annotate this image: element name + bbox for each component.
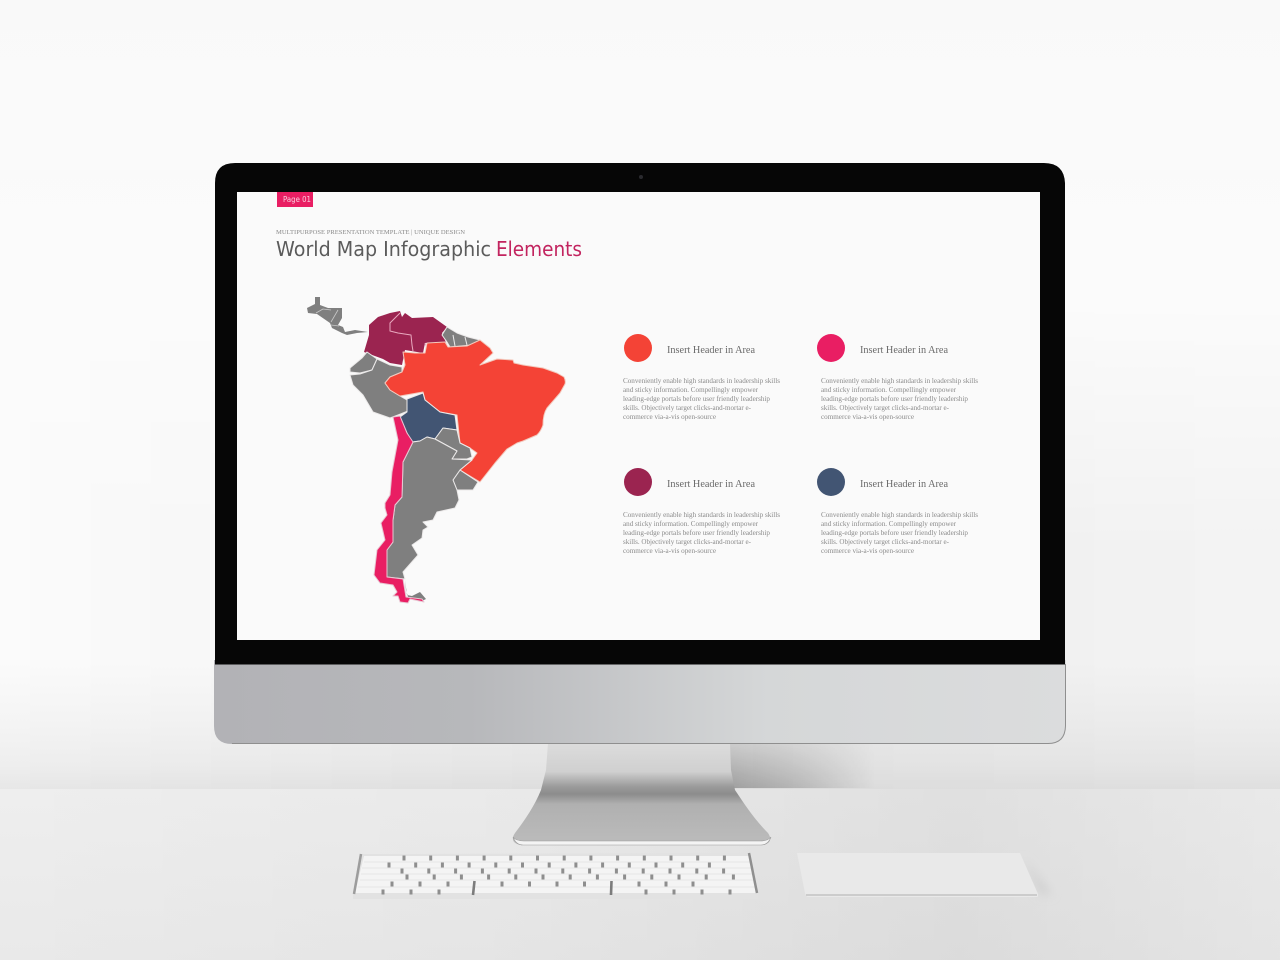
background: wall and desk — [0, 700, 1280, 960]
item description: skills. Objectively target clicks-and-mortar e- — [623, 404, 752, 412]
monitor — [214, 163, 1066, 845]
keyboard — [353, 853, 758, 899]
item description: and sticky information. Compellingly empower — [623, 386, 759, 394]
marker: orange — [624, 334, 652, 362]
item description: Conveniently enable high standards in leadership skills — [821, 511, 978, 519]
item description: and sticky information. Compellingly empower — [821, 520, 957, 528]
Bolivia — [400, 393, 457, 442]
Uruguay — [453, 470, 478, 490]
Colombia and Venezuela — [364, 311, 447, 365]
legend item: maroon — [623, 468, 780, 555]
item header: Insert Header in Area — [860, 345, 949, 356]
heading accent: Elements — [496, 237, 582, 261]
item description: commerce via-a-vis open-source — [623, 547, 716, 555]
item description: leading-edge portals before user friendly leadership — [623, 395, 770, 403]
Paraguay — [435, 428, 472, 459]
item description — [821, 377, 978, 421]
monitor chin — [214, 660, 1066, 744]
item header: Insert Header in Area — [860, 479, 949, 490]
Peru — [350, 359, 408, 418]
item description: commerce via-a-vis open-source — [821, 547, 914, 555]
item description: commerce via-a-vis open-source — [623, 413, 716, 421]
Guianas — [442, 327, 480, 347]
marker: pink — [817, 334, 845, 362]
item description: commerce via-a-vis open-source — [821, 413, 914, 421]
Ecuador — [350, 352, 377, 373]
heading: World Map Infographic — [276, 237, 491, 261]
item description: Conveniently enable high standards in leadership skills — [623, 377, 780, 385]
item description: and sticky information. Compellingly empower — [623, 520, 759, 528]
screen — [237, 192, 1040, 640]
Central America borders — [316, 309, 339, 326]
item description: skills. Objectively target clicks-and-mortar e- — [623, 538, 752, 546]
trackpad — [797, 853, 1052, 897]
item header: Insert Header in Area — [667, 345, 756, 356]
monitor bezel — [215, 163, 1065, 664]
Chile — [374, 416, 424, 603]
item description: Conveniently enable high standards in leadership skills — [623, 511, 780, 519]
marker: navy — [817, 468, 845, 496]
Colombia border — [390, 313, 436, 351]
map: South America — [307, 297, 565, 603]
legend item: pink — [817, 334, 978, 421]
legend item: navy — [817, 468, 978, 555]
monitor stand — [513, 743, 771, 845]
Central America — [307, 297, 368, 335]
title block — [276, 230, 582, 261]
item description: Conveniently enable high standards in leadership skills — [821, 377, 978, 385]
Guianas borders — [453, 335, 467, 346]
item description: and sticky information. Compellingly empower — [821, 386, 957, 394]
item description: skills. Objectively target clicks-and-mortar e- — [821, 538, 950, 546]
Tierra del Fuego — [405, 580, 426, 601]
page tag: Page 01 — [283, 195, 311, 204]
Brazil — [385, 340, 565, 482]
item description — [623, 377, 780, 421]
item description: leading-edge portals before user friendly leadership — [821, 395, 968, 403]
item description — [821, 511, 978, 555]
item header: Insert Header in Area — [667, 479, 756, 490]
item description: leading-edge portals before user friendly leadership — [821, 529, 968, 537]
marker: maroon — [624, 468, 652, 496]
camera — [639, 175, 643, 179]
Argentina — [387, 437, 472, 579]
item description — [623, 511, 780, 555]
page tag — [277, 192, 313, 207]
subtitle: MULTIPURPOSE PRESENTATION TEMPLATE | UNIQUE DESIGN — [276, 230, 466, 236]
item description: skills. Objectively target clicks-and-mortar e- — [821, 404, 950, 412]
item description: leading-edge portals before user friendly leadership — [623, 529, 770, 537]
legend item: orange — [623, 334, 780, 421]
